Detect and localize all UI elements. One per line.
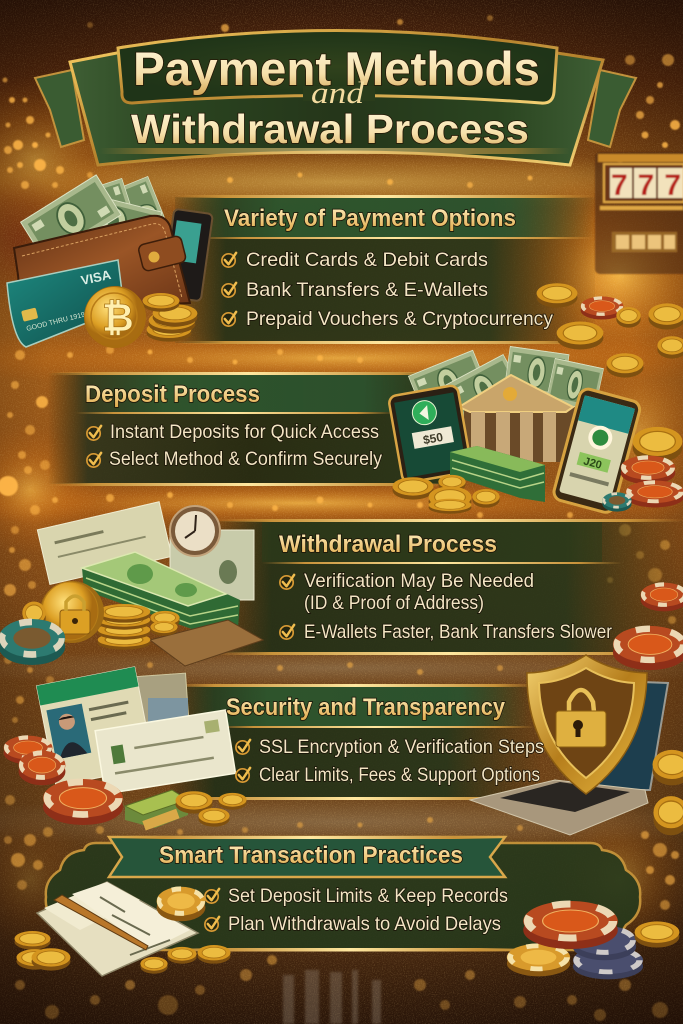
illustration: notebook, pen and coins — [14, 882, 231, 976]
id card — [37, 667, 154, 786]
second cheque — [170, 530, 254, 600]
credit card — [7, 260, 124, 347]
item: e-wallets: E-Wallets Faster, Bank Transfers Slower — [304, 621, 612, 643]
item: deposit limits: Set Deposit Limits & Keep Records — [228, 885, 508, 907]
heading: Withdrawal Process — [279, 531, 497, 558]
wallet clasp — [138, 235, 187, 272]
item: verification — [280, 570, 534, 614]
padlock — [556, 690, 606, 747]
heading: payment methods: Payment Methods — [133, 42, 540, 95]
panel: withdrawal process — [215, 519, 683, 655]
heading: Security and Transparency — [226, 694, 506, 721]
illustration: shield and laptop — [470, 655, 668, 835]
pen — [54, 895, 148, 950]
coins — [175, 791, 247, 827]
wallet — [14, 216, 190, 310]
coins at right edge — [652, 750, 683, 835]
main ribbon — [70, 52, 603, 165]
cheque — [37, 502, 172, 584]
section: deposit process text — [85, 381, 382, 470]
heading: Variety of Payment Options — [224, 205, 516, 232]
cheque — [95, 710, 236, 794]
illustration: cheques, clock and cash — [0, 502, 263, 666]
panel: variety of payment options — [175, 195, 595, 344]
upper plaque — [118, 30, 557, 103]
item: bank transfers: Bank Transfers & E-Wallets — [246, 279, 488, 301]
icon: coins and chip beside payment panel — [537, 283, 683, 378]
section: variety of payment options text — [222, 205, 553, 330]
chips — [0, 602, 65, 665]
chips at right edge — [613, 583, 683, 670]
right ribbon tail — [588, 70, 636, 147]
panel: security and transparency — [170, 684, 540, 800]
heading: and: and — [311, 75, 365, 110]
book stack — [125, 790, 188, 831]
coins — [150, 611, 180, 636]
banknotes — [20, 174, 174, 263]
right phone — [552, 387, 642, 514]
illustration: id card, cheque and chips — [4, 667, 247, 831]
left phone: $50 — [422, 430, 444, 447]
chips — [602, 427, 683, 512]
icon: slot machine: 777 — [611, 169, 681, 202]
heading: Smart Transaction Practices — [159, 842, 463, 869]
clock — [170, 506, 220, 556]
coin stack — [142, 293, 197, 342]
heading: Deposit Process — [85, 381, 260, 408]
item: ssl encryption: SSL Encryption & Verification Steps — [259, 736, 544, 758]
notebook — [37, 882, 198, 976]
item: clear limits: Clear Limits, Fees & Support Options — [259, 764, 540, 786]
cash stack — [450, 446, 545, 502]
bank building — [459, 375, 576, 462]
laptop — [470, 680, 668, 835]
illustration: casino chips and coins — [507, 901, 679, 979]
item: plan withdrawals: Plan Withdrawals to Avoid Delays — [228, 913, 501, 935]
section: smart transaction practices text — [159, 842, 508, 935]
illustration: wallet, cards and coins — [7, 174, 213, 348]
chips — [4, 736, 123, 825]
item: verification: Verification May Be Needed — [304, 570, 534, 592]
title banner — [35, 30, 636, 165]
left phone — [388, 385, 472, 483]
item: verification: (ID & Proof of Address) — [304, 592, 484, 614]
bitcoin coin — [84, 286, 146, 348]
section header ribbon — [109, 836, 505, 877]
item: instant deposits: Instant Deposits for Quick Access — [110, 421, 379, 443]
cash stack — [82, 552, 240, 632]
coin stack — [98, 604, 150, 650]
chip — [157, 887, 205, 921]
item: prepaid vouchers: Prepaid Vouchers & Cryptocurrency — [246, 308, 553, 330]
shield — [527, 655, 647, 794]
item: select method: Select Method & Confirm Securely — [109, 448, 382, 470]
credit card: VISA — [80, 267, 113, 288]
illustration: bank, phones and cash — [388, 346, 683, 514]
left ribbon tail — [35, 70, 84, 147]
banknotes — [408, 346, 604, 424]
wooden board — [150, 620, 263, 666]
panel: deposit process — [48, 372, 448, 486]
small documents — [130, 673, 190, 747]
heading: withdrawal process: Withdrawal Process — [131, 106, 529, 152]
phone — [162, 209, 213, 301]
right phone: J20 — [582, 455, 603, 472]
section: security and transparency text — [226, 694, 544, 786]
credit card: GOOD THRU 1919 — [26, 312, 86, 333]
panel: smart transaction practices — [46, 836, 640, 952]
lock coin — [40, 581, 104, 643]
section: withdrawal process text — [279, 531, 612, 643]
icon: slot machine — [595, 152, 683, 274]
coins — [393, 475, 500, 514]
bitcoin coin: ₿ — [102, 297, 134, 340]
item: credit cards: Credit Cards & Debit Cards — [246, 249, 488, 271]
coins — [140, 945, 231, 974]
